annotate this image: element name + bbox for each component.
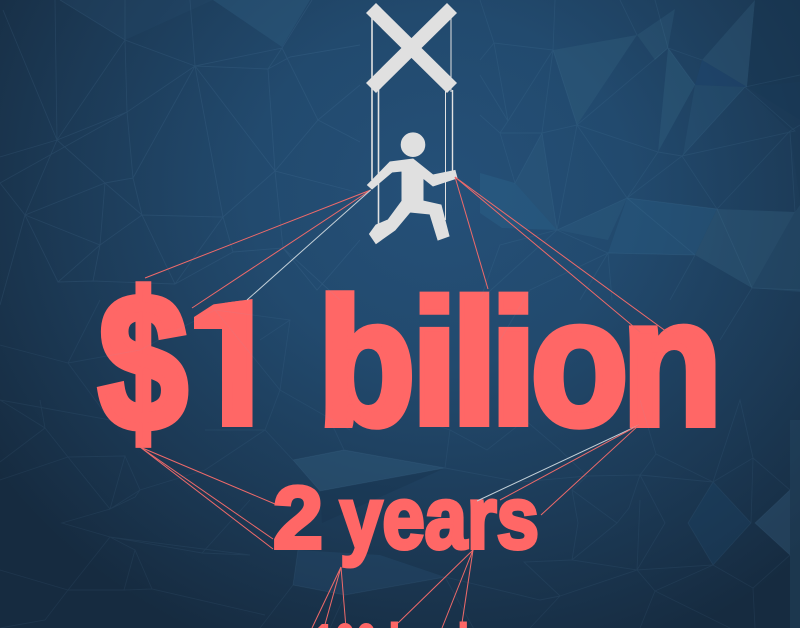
connector lines: figure to $1 bilion bbox=[145, 177, 667, 332]
heading: $1 bilion: 1 bbox=[185, 262, 285, 464]
connector lines: $1 bilion to 2 years bbox=[140, 425, 639, 549]
heading: $1 bilion: $ bbox=[99, 254, 187, 470]
background: mesh lines bbox=[0, 0, 360, 305]
heading: $1 bilion: b bbox=[318, 262, 415, 462]
connector lines: 2 years to 100 bucks bbox=[312, 550, 473, 628]
heading: $1 bilion: o bbox=[531, 262, 628, 462]
background: mesh lines right bbox=[480, 0, 800, 340]
background: mesh lines centre and lower bbox=[0, 300, 790, 628]
subheading: 2 years: years bbox=[340, 468, 539, 567]
puppet strings bbox=[372, 15, 452, 230]
cropped text: 100 bucks bbox=[313, 613, 501, 628]
heading: $1 bilion: l bbox=[450, 262, 500, 464]
heading: $1 bilion: i bbox=[410, 262, 460, 464]
icon: puppet control cross bbox=[366, 3, 457, 93]
subheading: 2 years bbox=[273, 468, 539, 567]
heading: $1 bilion: i bbox=[488, 262, 539, 464]
subheading: 2 years: 2 bbox=[273, 468, 323, 567]
icon: running puppet figure bbox=[368, 133, 457, 244]
heading: $1 bilion: n bbox=[622, 262, 722, 462]
heading: $1 bilion bbox=[96, 281, 716, 448]
